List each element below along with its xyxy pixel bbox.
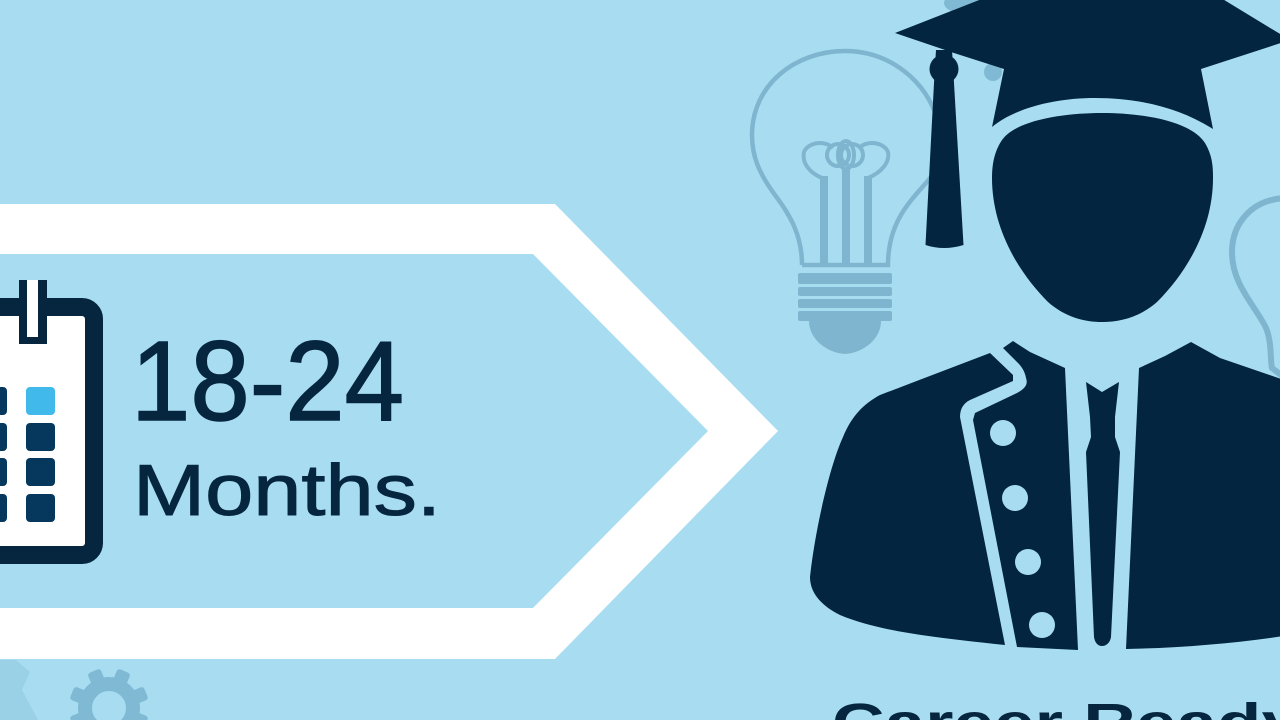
calendar ring xyxy=(19,280,47,344)
text: Months.: Months. xyxy=(133,451,441,531)
icon: background blobs behind cap xyxy=(944,0,1002,81)
icon: faded gear left xyxy=(0,660,38,720)
jacket centre panel xyxy=(973,341,1078,650)
jacket right panel xyxy=(1126,342,1280,649)
arrow: white outlined pentagon xyxy=(0,204,778,659)
icon: light bulb left xyxy=(752,51,935,265)
icon: bulb base xyxy=(798,273,892,354)
icon: calendar xyxy=(0,280,94,555)
jacket buttons xyxy=(990,420,1055,638)
graduation cap xyxy=(895,0,1280,129)
calendar day squares xyxy=(0,387,55,522)
icon: light bulb right xyxy=(1232,198,1280,378)
icon: graduate figure xyxy=(810,0,1280,650)
head xyxy=(992,113,1213,322)
icon: gear xyxy=(69,668,149,720)
heading: 18-24: 18-24 xyxy=(131,318,404,444)
tassel xyxy=(926,50,964,248)
jacket left panel xyxy=(810,353,1013,645)
necktie xyxy=(1086,382,1120,646)
bulb filaments xyxy=(804,141,888,178)
